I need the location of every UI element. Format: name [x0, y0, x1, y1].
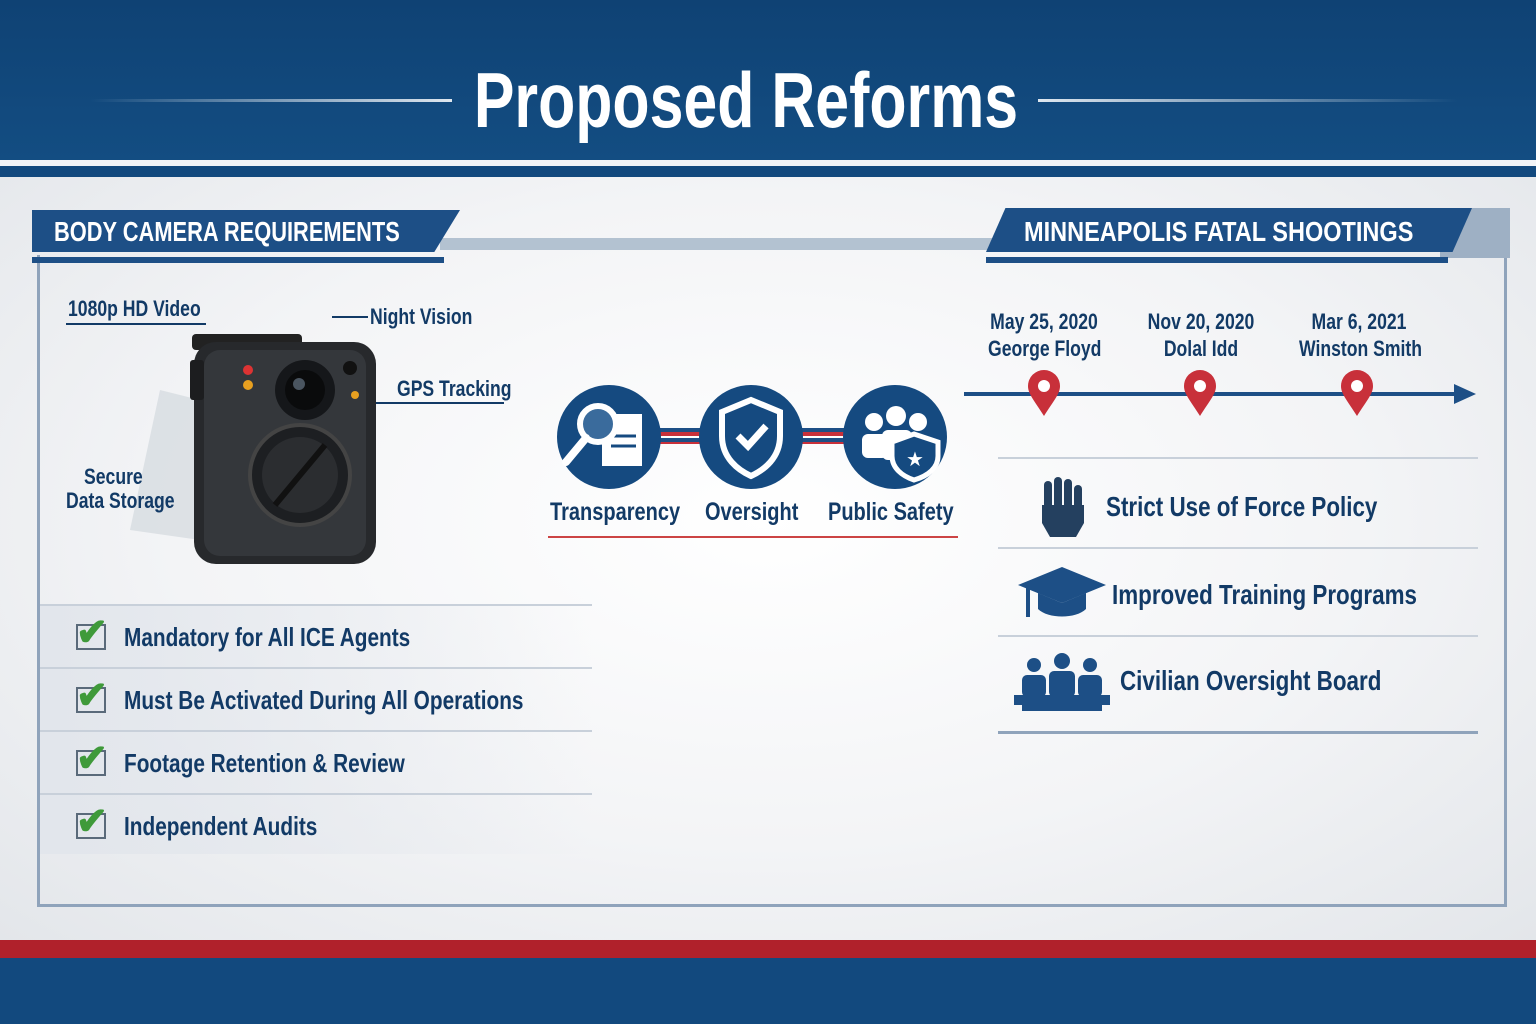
event 2: Nov 20, 2020 — [1148, 309, 1254, 334]
pillars: Public Safety — [828, 498, 954, 526]
header — [0, 0, 1536, 177]
timeline — [964, 309, 1476, 416]
pillars — [548, 385, 958, 538]
check item 1: Mandatory for All ICE Agents — [124, 622, 410, 652]
camera labels: 1080p HD Video — [68, 296, 201, 321]
reform list — [998, 457, 1478, 734]
check item 3: Footage Retention & Review — [124, 748, 405, 778]
event 1: May 25, 2020 — [990, 309, 1098, 334]
event 1: George Floyd — [988, 336, 1101, 361]
check item 3: ✔ — [76, 738, 108, 780]
icon: public safety: ★ — [906, 449, 924, 471]
check item 4: ✔ — [76, 801, 108, 843]
check item 2 — [40, 667, 592, 732]
item: training — [998, 547, 1478, 637]
check item 2: Must Be Activated During All Operations — [124, 685, 523, 715]
check item 1 — [40, 604, 592, 669]
camera labels: Data Storage — [66, 488, 175, 513]
event 3 — [1299, 309, 1422, 361]
event 3: Mar 6, 2021 — [1312, 309, 1406, 334]
event 3: Winston Smith — [1299, 336, 1422, 361]
check item 4 — [40, 793, 592, 856]
camera labels — [66, 296, 511, 513]
icon: transparency — [557, 385, 661, 489]
check item 3 — [40, 730, 592, 795]
panel header: body camera: BODY CAMERA REQUIREMENTS — [54, 216, 400, 247]
event 2 — [1148, 309, 1254, 361]
footer band — [0, 940, 1536, 1024]
event 2: Dolal Idd — [1164, 336, 1238, 361]
camera labels: GPS Tracking — [397, 376, 511, 401]
camera illustration — [130, 334, 376, 564]
camera labels: Night Vision — [370, 304, 472, 329]
event 1 — [988, 309, 1101, 361]
item: use of force: Strict Use of Force Policy — [1106, 491, 1377, 522]
item: use of force — [998, 457, 1478, 549]
background — [0, 177, 1536, 940]
pillars: Oversight — [705, 498, 798, 526]
check item 2: ✔ — [76, 675, 108, 717]
panel header: Minneapolis: MINNEAPOLIS FATAL SHOOTINGS — [1024, 216, 1413, 247]
checklist — [40, 604, 592, 843]
item: oversight board — [998, 635, 1478, 734]
icon: oversight — [699, 385, 803, 489]
panel header: body camera — [32, 210, 460, 263]
title: Proposed Reforms — [474, 56, 1018, 144]
check item 1: ✔ — [76, 612, 108, 654]
main frame — [37, 255, 1507, 907]
pillars: Transparency — [550, 498, 680, 526]
item: training: Improved Training Programs — [1112, 579, 1417, 610]
panel header: Minneapolis — [986, 208, 1472, 263]
item: oversight board: Civilian Oversight Board — [1120, 665, 1381, 696]
icon: public safety — [843, 385, 947, 489]
camera labels: Secure — [84, 464, 143, 489]
check item 4: Independent Audits — [124, 811, 317, 841]
